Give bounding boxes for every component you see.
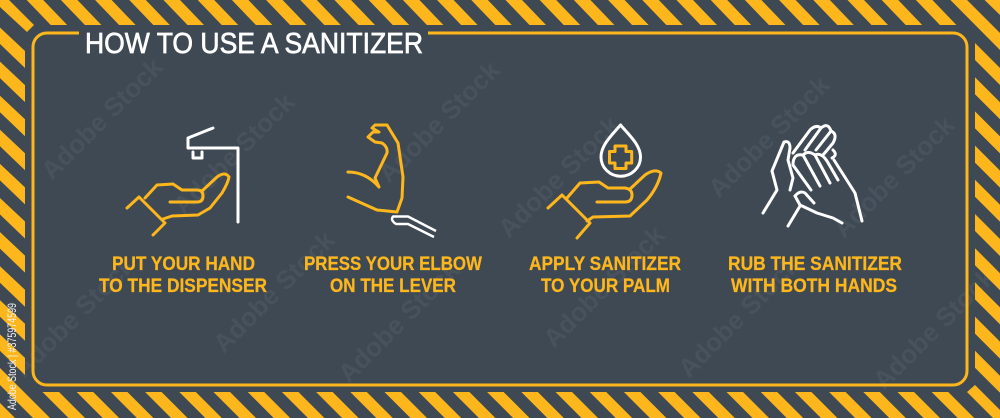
label: step 3: APPLY SANITIZER: [529, 254, 681, 275]
panel frame: [33, 33, 967, 385]
label: step 2: ON THE LEVER: [330, 276, 456, 297]
icon: sanitizer drop over palm: [548, 125, 661, 238]
label: step 1: TO THE DISPENSER: [99, 276, 267, 297]
text: Adobe Stock: [167, 86, 301, 220]
label: step 1: PUT YOUR HAND: [112, 254, 255, 275]
text: Adobe Stock: [702, 69, 836, 203]
text: Adobe Stock: [827, 109, 961, 243]
text: Adobe Stock: [372, 54, 506, 188]
label: step 3: [529, 254, 681, 297]
icon: rubbing hands: [763, 126, 862, 226]
label: step 4: [728, 254, 902, 297]
label: step 2: PRESS YOUR ELBOW: [304, 254, 482, 275]
text: Adobe Stock: [672, 249, 806, 383]
text: Adobe Stock: [332, 254, 466, 388]
label: step 2: [304, 254, 482, 297]
text: Adobe Stock: [492, 109, 626, 243]
title: HOW TO USE A SANITIZER: [85, 28, 423, 60]
text: Adobe Stock: [35, 51, 169, 185]
text: Adobe Stock: [207, 224, 341, 358]
label: step 4: RUB THE SANITIZER: [728, 254, 902, 275]
label: step 4: WITH BOTH HANDS: [731, 276, 897, 297]
icon: hand under faucet: [127, 128, 238, 235]
text: Adobe Stock: [867, 261, 1000, 395]
text: Adobe Stock: [7, 249, 141, 383]
stock id caption: Adobe Stock | #375974599: [5, 303, 19, 410]
label: step 3: TO YOUR PALM: [541, 276, 670, 297]
label: step 1: [99, 254, 267, 297]
text: Adobe Stock: [537, 219, 671, 353]
icon: flexed arm pressing lever: [348, 125, 436, 237]
